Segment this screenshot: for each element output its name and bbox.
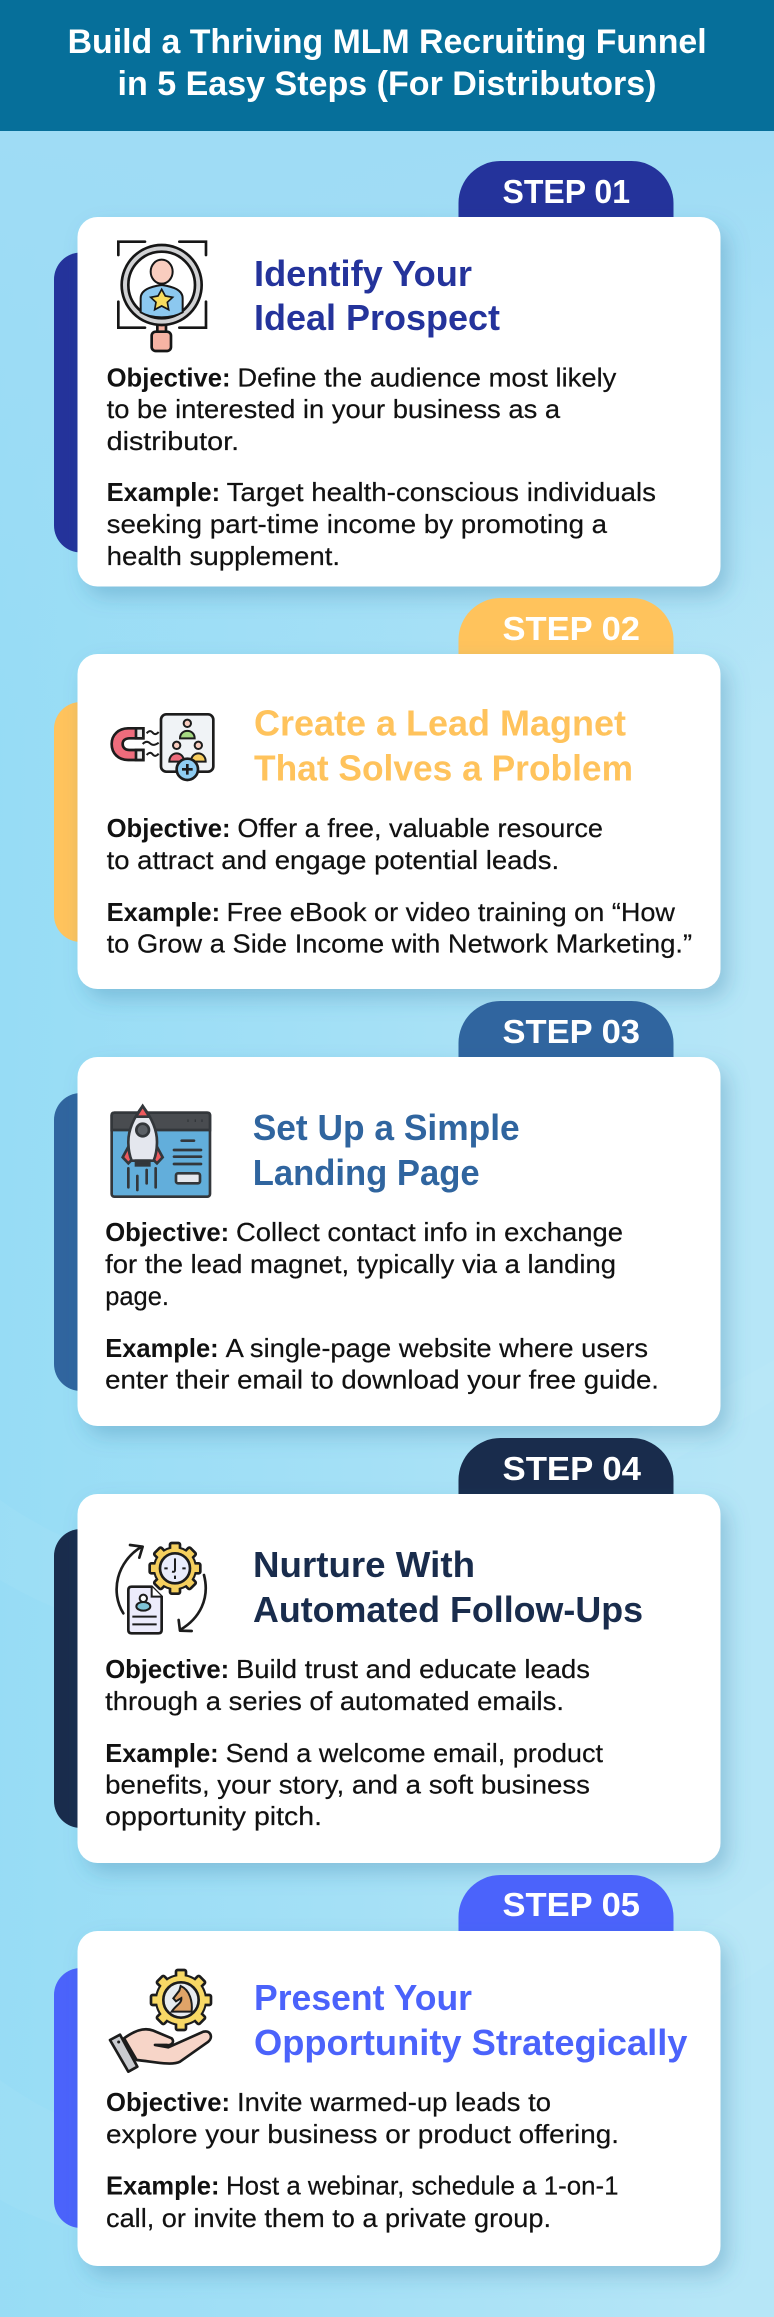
step 01 heading: Identify Your [254,253,472,294]
step 03 objective: page. [105,1281,169,1311]
step 02 heading [254,703,633,789]
step 02 example: Free eBook or video training on “How [227,897,675,927]
step 04 example: Example: [105,1738,219,1768]
step 01 objective [107,362,616,456]
step 02 objective: Objective: [107,813,231,843]
step 05 heading: Opportunity Strategically [254,2022,688,2063]
header banner [0,0,774,131]
panel: step 01 identify your ideal prospect [54,161,720,586]
title: in 5 Easy Steps (For Distributors) [118,65,656,103]
step 04 example: opportunity pitch. [105,1801,322,1831]
step 01 objective: to be interested in your business as a [107,394,561,424]
step 03 heading: Landing Page [253,1152,480,1193]
step 02 objective: Offer a free, valuable resource [237,813,603,843]
step 04 heading: Automated Follow-Ups [253,1589,643,1630]
icon: magnet attracting people [112,714,213,780]
step 02 objective [107,813,603,875]
step 03 objective: Collect contact info in exchange [236,1217,623,1247]
step 01 example: health supplement. [107,541,340,571]
step 01 heading [254,253,500,338]
step 05 objective: explore your business or product offering. [106,2119,619,2149]
step 01 objective: Objective: [107,362,231,392]
step 05 objective [106,2087,619,2149]
step 04 heading: Nurture With [253,1544,475,1585]
panel: step 03 set up a simple landing page [54,1001,720,1426]
step 05 objective: Objective: [106,2087,230,2117]
panel: step 04 nurture with automated follow-ups [54,1438,720,1863]
step 04 label: STEP 04 [502,1450,642,1487]
step 05 heading [254,1977,688,2063]
step 02 heading: That Solves a Problem [254,748,633,789]
step 05 objective: Invite warmed-up leads to [237,2087,551,2117]
icon: magnifier over person [118,242,206,351]
step 03 objective [105,1217,623,1311]
step 04 objective [105,1654,590,1716]
step 04 objective: Build trust and educate leads [236,1654,590,1684]
step 04 heading [253,1544,643,1630]
step 03 heading [253,1107,520,1193]
step 01 example: Target health-conscious individuals [227,477,656,507]
step 05 heading: Present Your [254,1977,472,2018]
step 04 example: Send a welcome email, product [226,1738,604,1768]
step 01 objective: Define the audience most likely [237,362,616,392]
step 03 example: A single-page website where users [226,1333,648,1363]
step 05 example: Host a webinar, schedule a 1-on-1 [226,2170,618,2200]
step 04 objective: Objective: [105,1654,229,1684]
step 03 label: STEP 03 [502,1013,640,1050]
icon: automation gear, clock and document [117,1543,206,1633]
step 02 objective: to attract and engage potential leads. [107,845,559,875]
step 03 objective: Objective: [105,1217,229,1247]
step 03 objective: for the lead magnet, typically via a landing [105,1249,616,1279]
step 05 label: STEP 05 [502,1886,640,1923]
step 01 example: seeking part-time income by promoting a [107,509,608,539]
icon: hand holding gear with chess knight [110,1970,211,2072]
step 05 example: Example: [106,2170,220,2200]
step 05 example: call, or invite them to a private group. [106,2203,551,2233]
step 02 heading: Create a Lead Magnet [254,703,626,744]
title [68,23,707,103]
step 02 example: Example: [107,897,220,927]
step 02 example [107,897,692,958]
step 01 label: STEP 01 [502,173,630,210]
step 05 example [106,2170,618,2233]
step 03 example [105,1333,659,1394]
step 01 objective: distributor. [107,426,239,456]
step 03 example: enter their email to download your free guide. [105,1364,659,1394]
title: Build a Thriving MLM Recruiting Funnel [68,23,707,61]
step 03 example: Example: [105,1333,219,1363]
step 01 example: Example: [107,477,220,507]
step 02 example: to Grow a Side Income with Network Marketing.” [107,928,692,958]
step 01 heading: Ideal Prospect [254,297,500,338]
panel: step 05 present your opportunity strategically [54,1875,720,2266]
icon: rocket launching from web page [112,1106,210,1197]
step 01 example [107,477,656,571]
step 04 example [105,1738,604,1831]
step 02 label: STEP 02 [502,610,640,647]
step 04 example: benefits, your story, and a soft business [105,1770,590,1800]
panel: step 02 create a lead magnet [54,598,720,989]
step 04 objective: through a series of automated emails. [105,1686,564,1716]
step 03 heading: Set Up a Simple [253,1107,520,1148]
